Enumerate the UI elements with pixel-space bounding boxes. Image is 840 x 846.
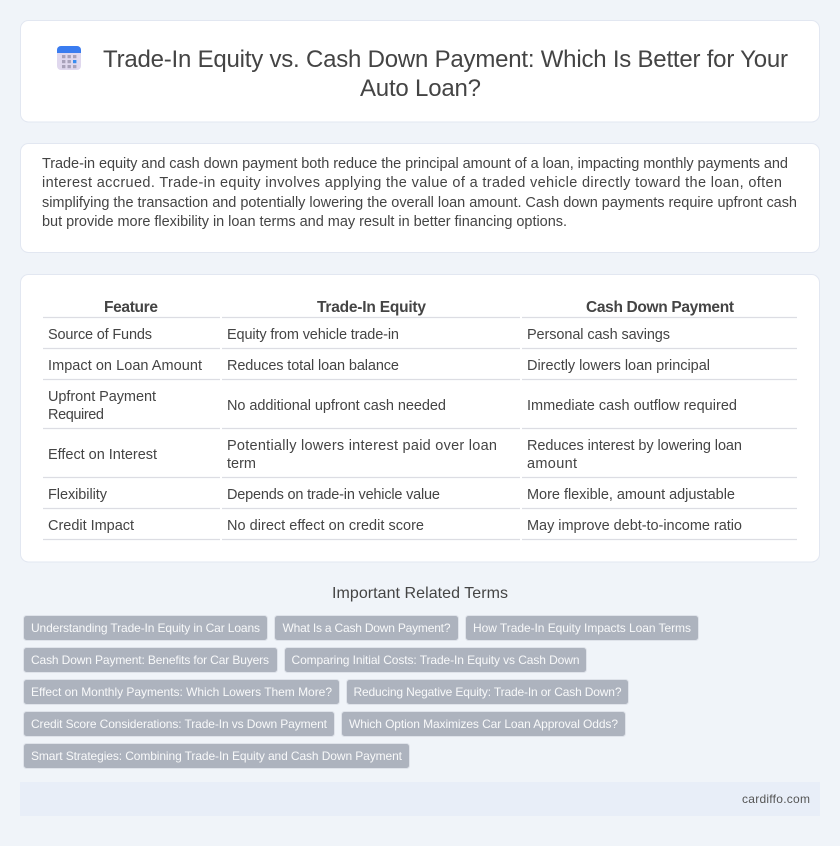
row: flexibility: Depends on trade-in vehicle value [227, 487, 440, 503]
row: flexibility: Flexibility [48, 487, 108, 503]
row: credit impact [48, 518, 742, 534]
tag [346, 680, 628, 704]
row: effect on interest: Effect on Interest [48, 447, 157, 463]
row: effect on interest [48, 438, 742, 472]
tag [24, 712, 334, 736]
tag [342, 712, 626, 736]
footer [20, 782, 820, 816]
tag: How Trade-In Equity Impacts Loan Terms [473, 621, 691, 635]
row: upfront payment required [48, 389, 737, 423]
row: credit impact: No direct effect on credit score [227, 518, 424, 534]
intro paragraph [42, 156, 797, 230]
intro paragraph: but provide more flexibility in loan terms and may result in better financing options. [42, 214, 567, 230]
table header row: Cash Down Payment [586, 299, 734, 316]
tag [24, 744, 410, 768]
panel: header [20, 20, 820, 122]
table header row: Trade-In Equity [317, 299, 426, 316]
table header row: Feature [104, 299, 158, 316]
tag: Credit Score Considerations: Trade-In vs Down Payment [31, 717, 328, 731]
intro paragraph: interest accrued. Trade-in equity involves applying the value of a traded vehicle directly toward the loan, often [42, 175, 782, 191]
row: impact on loan amount [48, 358, 710, 374]
panel: comparison table [20, 274, 820, 562]
row: source of funds [48, 327, 670, 343]
tag: Which Option Maximizes Car Loan Approval Odds? [349, 717, 618, 731]
icon: calendar [57, 46, 81, 70]
row: source of funds: Personal cash savings [527, 327, 670, 343]
row: effect on interest: Potentially lowers interest paid over loan [227, 438, 497, 454]
tag [466, 616, 698, 640]
row: impact on loan amount: Reduces total loan balance [227, 358, 399, 374]
title: Trade-In Equity vs. Cash Down Payment: Which Is Better for Your [103, 46, 788, 73]
related term tags [24, 616, 698, 768]
intro paragraph: Trade-in equity and cash down payment both reduce the principal amount of a loan, impacting monthly payments and [42, 156, 788, 172]
row: effect on interest: amount [527, 456, 577, 472]
tag: Understanding Trade-In Equity in Car Loans [31, 621, 260, 635]
tag [284, 648, 586, 672]
tag: Reducing Negative Equity: Trade-In or Cash Down? [354, 685, 622, 699]
title: Auto Loan? [360, 75, 481, 102]
tag [24, 680, 340, 704]
heading: related terms: Important Related Terms [332, 585, 508, 602]
row: upfront payment required: Immediate cash outflow required [527, 398, 737, 414]
row: upfront payment required: Required [48, 407, 104, 423]
tag: Smart Strategies: Combining Trade-In Equity and Cash Down Payment [31, 749, 403, 763]
tag [274, 616, 458, 640]
row: source of funds: Equity from vehicle trade-in [227, 327, 399, 343]
tag: Effect on Monthly Payments: Which Lowers Them More? [31, 685, 332, 699]
row: source of funds: Source of Funds [48, 327, 152, 343]
row: upfront payment required: Upfront Payment [48, 389, 156, 405]
row: credit impact: May improve debt-to-income ratio [527, 518, 742, 534]
row: credit impact: Credit Impact [48, 518, 134, 534]
panel: intro [20, 144, 820, 252]
tag: What Is a Cash Down Payment? [282, 621, 451, 635]
title [103, 46, 788, 102]
table grid lines [43, 318, 797, 540]
row: impact on loan amount: Impact on Loan Amount [48, 358, 202, 374]
tag: Comparing Initial Costs: Trade-In Equity vs Cash Down [292, 653, 580, 667]
intro paragraph: simplifying the transaction and potentially lowering the overall loan amount. Cash down payments require upfront cash [42, 195, 797, 211]
row: upfront payment required: No additional upfront cash needed [227, 398, 446, 414]
row: effect on interest: Reduces interest by lowering loan [527, 438, 742, 454]
tag [24, 616, 268, 640]
footer: cardiffo.com [742, 792, 810, 806]
tag [24, 648, 278, 672]
table header row [104, 299, 734, 316]
row: effect on interest: term [227, 456, 256, 472]
row: flexibility [48, 487, 735, 503]
tag: Cash Down Payment: Benefits for Car Buyers [31, 653, 269, 667]
row: impact on loan amount: Directly lowers loan principal [527, 358, 710, 374]
row: flexibility: More flexible, amount adjustable [527, 487, 735, 503]
